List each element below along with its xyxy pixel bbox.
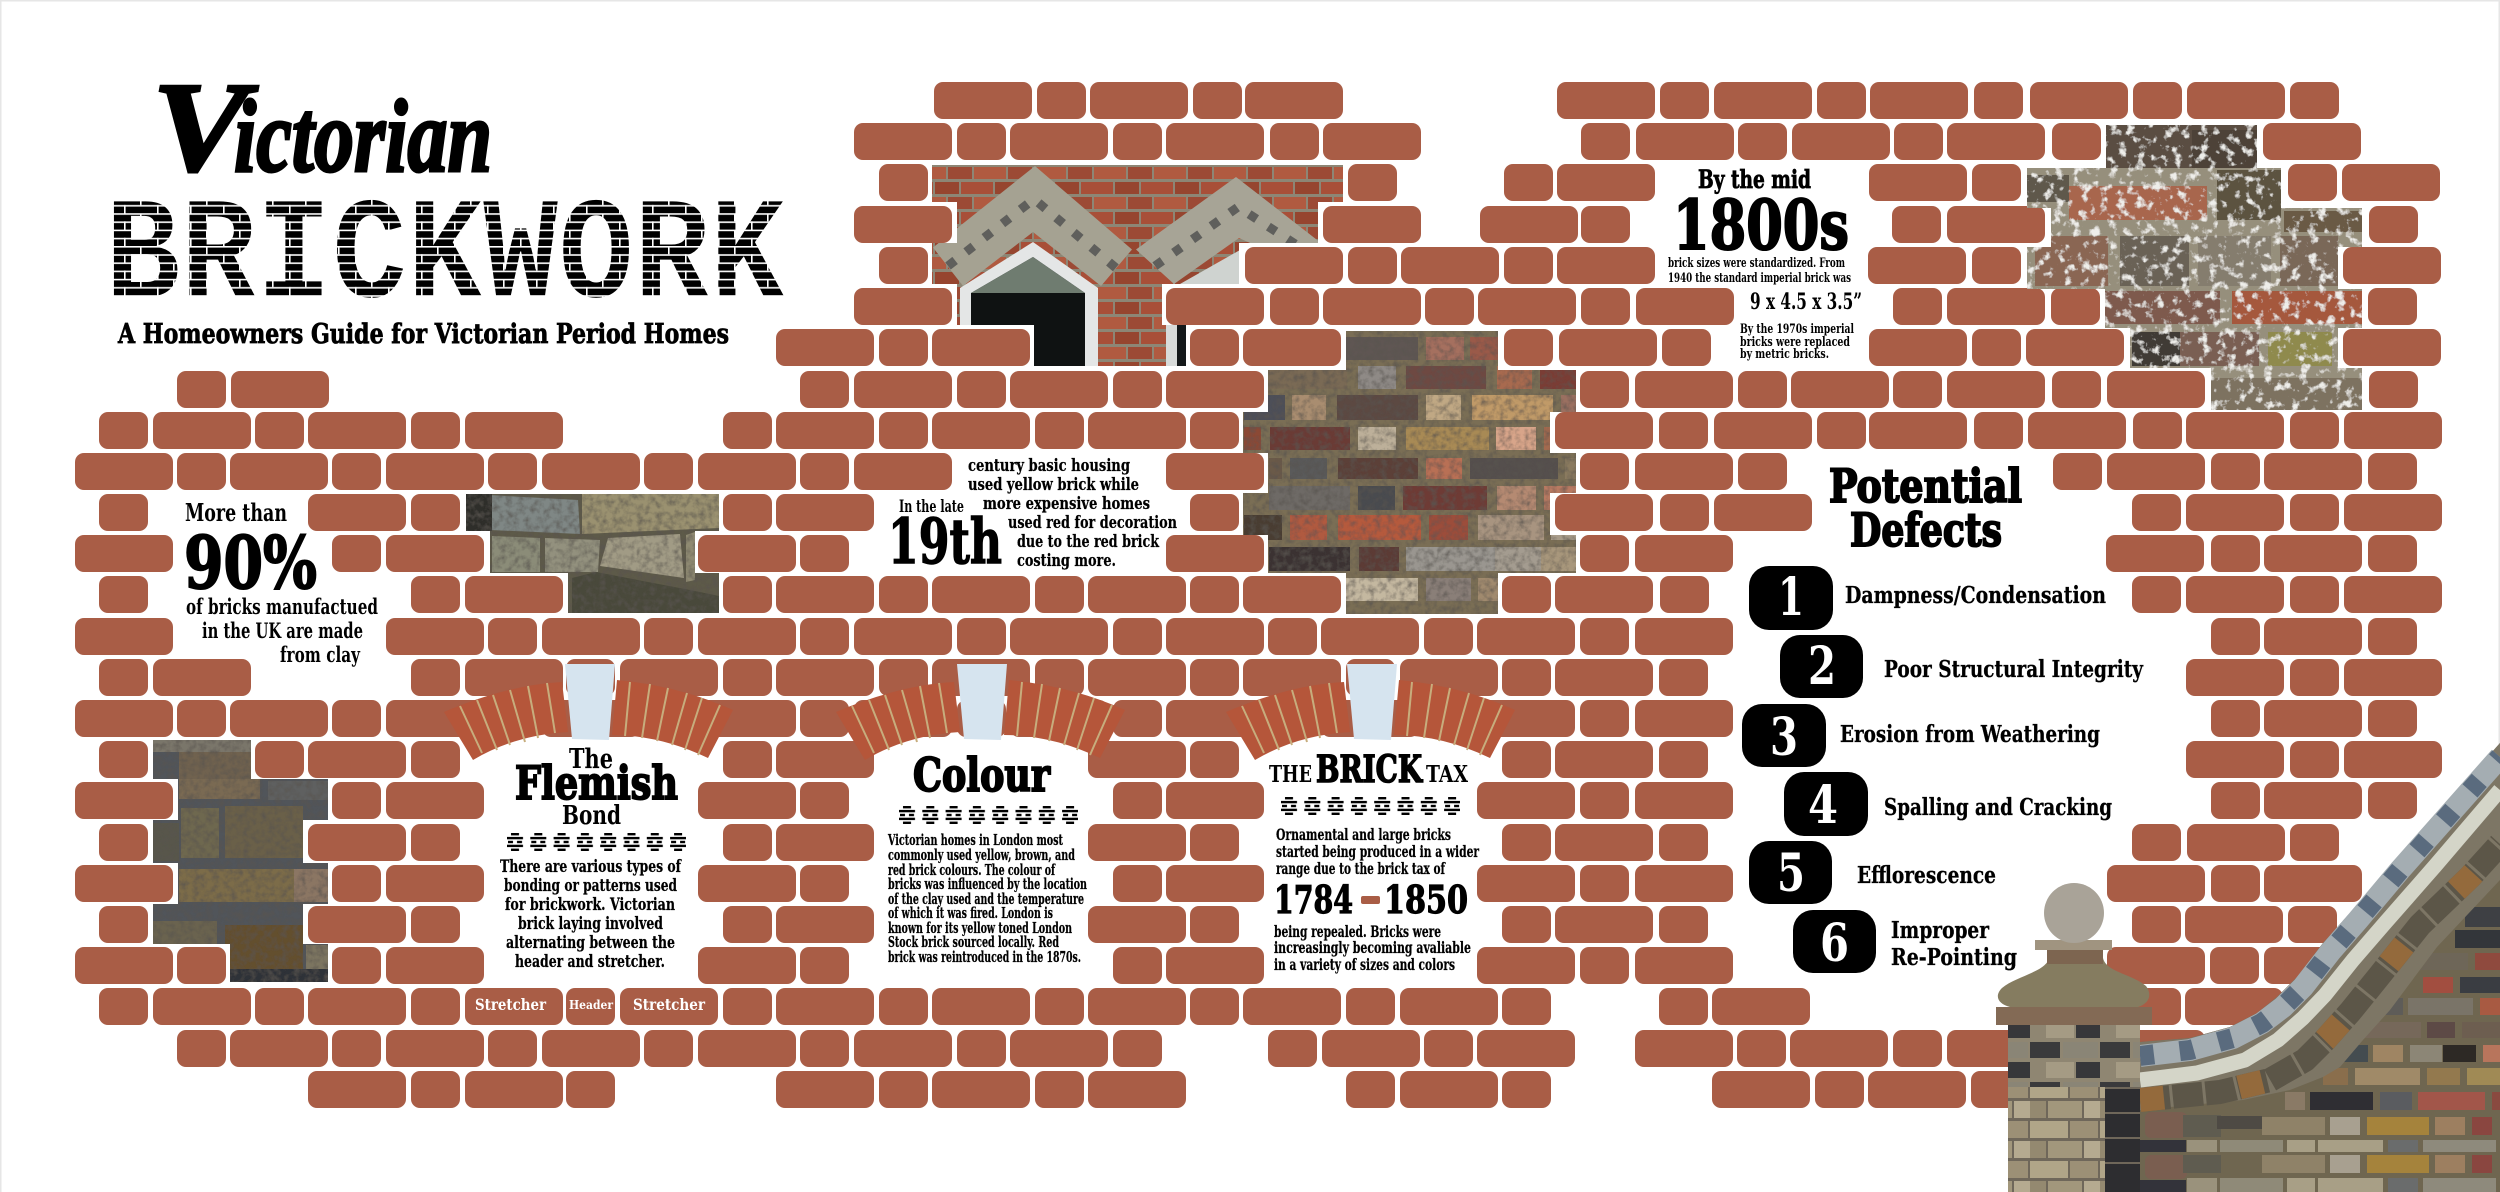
photo: efflorescent brick [2027, 125, 2362, 410]
panel: The Flemish Bond: header and stretcher. [515, 952, 665, 972]
icon: brick dash [1361, 896, 1380, 904]
panel: The Flemish Bond [475, 744, 705, 1014]
photo: gabled windows in red brick [932, 165, 1343, 366]
brick label: header: Header [569, 998, 614, 1012]
panel: The Brick Tax: increasingly becoming avaliable [1274, 938, 1471, 957]
defect 6 [1793, 910, 2017, 974]
defect 3: 3 [1770, 707, 1798, 768]
panel: The Flemish Bond: brick laying involved [518, 914, 663, 934]
panel: 19th century text: due to the red brick [1017, 532, 1160, 552]
panel: 1800s standardisation text: By the mid [1698, 165, 1811, 194]
subtitle: A Homeowners Guide for Victorian Period Homes [117, 319, 729, 350]
panel: 1800s standardisation text: 1940 the standard imperial brick was [1668, 271, 1851, 286]
panel: The Brick Tax: Ornamental and large bricks [1276, 825, 1451, 844]
panel: The Brick Tax: BRICK [1316, 747, 1423, 791]
panel: The Brick Tax: THE [1269, 761, 1312, 788]
panel: Colour: Stock brick sourced locally. Red [888, 934, 1059, 951]
panel: Colour: bricks was influenced by the location [888, 876, 1087, 893]
title script: Victorian: V [152, 56, 259, 198]
panel: Colour [887, 748, 1087, 966]
defect 1: 1 [1778, 567, 1804, 628]
panel: 1800s standardisation text: 9 x 4.5 x 3.5” [1750, 289, 1862, 315]
defect 5 [1749, 841, 1996, 904]
defect 3 [1742, 704, 2100, 768]
brick wall: middle section [854, 82, 1578, 1108]
panel: 90 percent fact [184, 498, 378, 667]
brick label: stretcher: Stretcher [633, 995, 705, 1014]
panel: The Flemish Bond: alternating between the [506, 933, 675, 953]
photo: multi-coloured London brick [1243, 331, 1576, 614]
panel: 19th century text: more expensive homes [983, 494, 1150, 514]
panel: The Brick Tax: being repealed. Bricks were [1274, 922, 1441, 941]
heading [1829, 459, 2022, 557]
panel: 1800s standardisation text [1668, 165, 1862, 362]
photo: Flemish bond brick [153, 740, 328, 982]
brick pier [2008, 1025, 2140, 1192]
panel: 19th century text: costing more. [1017, 551, 1116, 571]
wall brickwork [2140, 743, 2500, 1192]
title brick lettering: BRICKWORK: BRICKWORK [105, 175, 785, 341]
panel: Colour: brick was reintroduced in the 1870s. [888, 949, 1081, 966]
panel: 19th century text: century basic housing [968, 456, 1130, 476]
panel: Potential Defects [1742, 459, 2144, 974]
panel: The Flemish Bond: Bond [562, 801, 621, 831]
panel: 19th century text: used red for decoration [1008, 513, 1177, 533]
panel: Colour: Colour [913, 748, 1051, 802]
defect 1: Dampness/Condensation [1845, 582, 2106, 609]
defect 2 [1780, 635, 2144, 698]
title [100, 56, 790, 350]
arch: brick tax [1226, 664, 1515, 760]
defect 6: Re-Pointing [1891, 944, 2017, 971]
defect 2: 2 [1808, 636, 1836, 697]
photo: Victorian garden wall with finial [1996, 743, 2500, 1192]
defect 6: Improper [1891, 917, 1990, 944]
panel: Colour: of the clay used and the temperature [888, 891, 1084, 908]
panel: 1800s standardisation text: 1800s [1673, 186, 1849, 266]
panel: 1800s standardisation text: By the 1970s imperial [1740, 322, 1854, 337]
panel: Colour: of which it was fired. London is [888, 905, 1053, 922]
defect 4: Spalling and Cracking [1884, 794, 2112, 821]
title script: Victorian [152, 56, 492, 198]
panel: 1800s standardisation text: by metric bricks. [1740, 347, 1829, 362]
panel: The Flemish Bond: bonding or patterns used [504, 876, 677, 896]
heading: Defects [1850, 503, 2002, 557]
panel: 90 percent fact: 90% [184, 520, 317, 605]
defect 4 [1784, 772, 2112, 836]
panel: 19th century text: used yellow brick while [968, 475, 1139, 495]
defect 3: Erosion from Weathering [1840, 721, 2100, 748]
photo: weathered stone blocks [466, 494, 719, 613]
panel: The Brick Tax: TAX [1426, 761, 1468, 788]
panel: The Brick Tax: range due to the brick tax of [1276, 859, 1446, 878]
icon: brick divider [1281, 797, 1460, 815]
panel: The Brick Tax: 1784 [1274, 877, 1353, 922]
coping curve [2140, 743, 2500, 1110]
brick wall: left section [75, 329, 874, 1108]
panel: The Brick Tax: started being produced in a wider [1276, 842, 1479, 861]
defect 6: 6 [1820, 913, 1849, 974]
panel: 19th century text: 19th [888, 505, 1002, 578]
brick label: stretcher: Stretcher [475, 995, 546, 1014]
arch: colour [836, 664, 1125, 760]
defect 5: 5 [1777, 843, 1805, 904]
panel: 19th century text [888, 456, 1177, 578]
panel: Colour: known for its yellow toned London [888, 920, 1072, 937]
panel: 90 percent fact: of bricks manufactued [186, 594, 378, 619]
arch: Flemish bond [444, 664, 733, 760]
pier cap and finial [1996, 883, 2152, 1025]
icon: brick divider [899, 806, 1078, 824]
panel: 19th century text: In the late [899, 497, 964, 517]
panel: The Flemish Bond: There are various types of [500, 857, 682, 877]
defect 2: Poor Structural Integrity [1884, 656, 2144, 683]
panel: 1800s standardisation text: brick sizes were standardized. From [1668, 256, 1845, 271]
panel: Colour: Victorian homes in London most [887, 832, 1063, 849]
panel: Colour: red brick colours. The colour of [888, 862, 1056, 879]
heading: Potential [1829, 459, 2022, 513]
panel: The Brick Tax: in a variety of sizes and colors [1274, 955, 1455, 974]
panel: The Flemish Bond: Flemish [515, 756, 678, 810]
panel: 1800s standardisation text: bricks were replaced [1740, 335, 1850, 350]
panel: Colour: commonly used yellow, brown, and [888, 847, 1075, 864]
panel: 90 percent fact: in the UK are made [202, 618, 363, 643]
panel: 90 percent fact: More than [185, 498, 287, 527]
icon: brick divider [507, 833, 686, 851]
title script: Victorian: ictorian [234, 79, 492, 194]
panel: The Flemish Bond: The [569, 744, 613, 775]
defect 1 [1749, 566, 2106, 630]
brick wall: right section [1555, 82, 2442, 1108]
panel: The Brick Tax [1269, 747, 1479, 974]
defect 4: 4 [1808, 775, 1838, 836]
panel: The Brick Tax: 1850 [1384, 877, 1468, 922]
panel: 90 percent fact: from clay [280, 642, 361, 667]
defect 5: Efflorescence [1857, 862, 1996, 889]
panel: The Flemish Bond: for brickwork. Victorian [505, 895, 675, 915]
